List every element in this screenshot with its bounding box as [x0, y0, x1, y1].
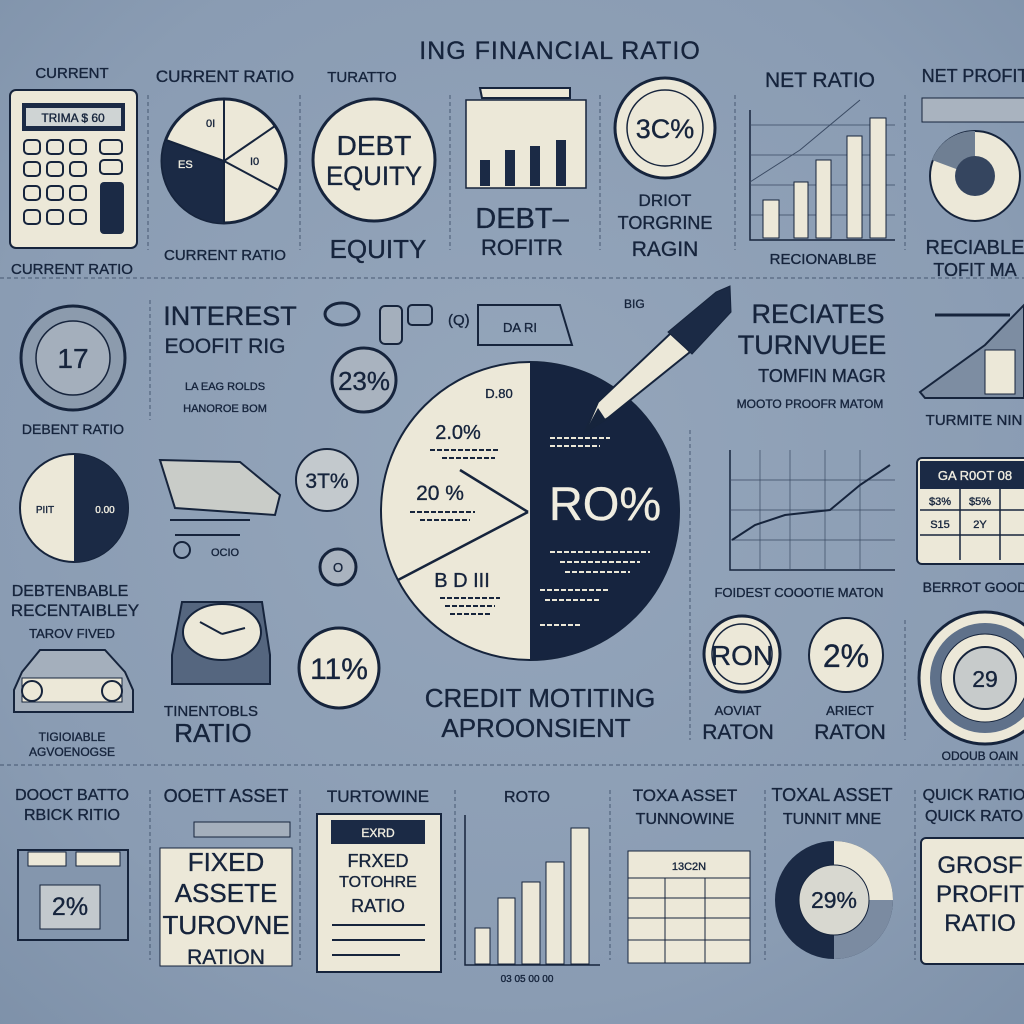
panel: target dial: ODOUB OAIN — [942, 749, 1018, 763]
panel: debt equity: DEBT — [337, 130, 411, 161]
panel: 2% badge — [809, 618, 886, 744]
panel: RON badge: RON — [711, 640, 773, 671]
panel: current ratio pie: CURRENT RATIO — [156, 67, 294, 86]
panel: total asset table: TOXA ASSET — [633, 786, 737, 805]
panel: total asset table: TUNNOWINE — [636, 811, 734, 828]
badge 11% — [299, 628, 379, 708]
panel: calculator: CURRENT RATIO — [11, 261, 133, 278]
icon: gauge: TINENTOBLS — [164, 703, 258, 720]
panel: current ratio pie: 0I — [206, 118, 215, 130]
badge 37%: 3T% — [305, 470, 349, 493]
panel: gross profit: QUICK RATO — [925, 808, 1023, 825]
bar chart: ratio — [465, 789, 600, 985]
panel: debt ratio coin: 17 — [57, 343, 89, 374]
panel: fixed asset: OOETT ASSET — [164, 786, 288, 806]
title: ING FINANCIAL RATIO — [419, 37, 701, 65]
line chart: FOIDEST COOOTIE MATON — [714, 585, 884, 600]
panel: percent badge: TORGRINE — [618, 213, 712, 233]
panel: receivable text: TAROV FIVED — [29, 626, 115, 641]
panel: quick ratio — [15, 787, 129, 940]
panel: net ratio bar chart: NET RATIO — [765, 69, 875, 92]
panel: debt equity: EQUITY — [326, 161, 422, 191]
line chart — [714, 450, 895, 600]
panel: fixed asset: RATION — [187, 946, 265, 969]
panel: target dial: 29 — [972, 666, 998, 692]
panel: interest heading: LA EAG ROLDS — [185, 381, 265, 393]
bar chart: ratio: ROTO — [504, 789, 550, 806]
panel: debt ratio coin: DEBENT RATIO — [22, 421, 124, 437]
icon row above central pie: (Q) — [448, 312, 470, 329]
panel: calculator: CURRENT — [35, 65, 109, 82]
panel: half pie: PIIT — [36, 505, 54, 516]
panel: table — [917, 458, 1024, 595]
panel: receivable text: DEBTENBABLE — [12, 583, 128, 600]
heading: credit monitoring — [425, 683, 655, 743]
panel: gross profit — [921, 787, 1024, 964]
panel: current ratio pie — [156, 67, 294, 264]
panel: gross profit: PROFIT — [936, 881, 1024, 908]
panel: table: $3% — [929, 496, 951, 508]
panel: RON badge — [702, 616, 780, 744]
panel: gross profit: GROSF — [937, 852, 1023, 879]
panel: receivables turnover: RECIATES — [751, 299, 885, 329]
panel: half pie: 0.00 — [95, 505, 115, 516]
panel: turnover document: FRXED — [347, 851, 409, 871]
panel: receivables turnover — [737, 299, 886, 411]
panel: net ratio bar chart: RECIONABLBE — [770, 251, 876, 268]
panel: debt ratio coin — [21, 306, 125, 437]
panel: table: S15 — [930, 519, 950, 531]
panel: net profit: RECIABLE — [926, 237, 1024, 259]
panel: 2% badge: RATON — [814, 721, 886, 744]
panel: total asset ring — [771, 785, 893, 959]
panel: 2% badge: ARIECT — [826, 703, 874, 718]
heading: credit monitoring: APROONSIENT — [441, 713, 631, 743]
icon: vehicle — [160, 460, 280, 559]
panel: car: TIGIOIABLE — [39, 730, 105, 744]
panel: quick ratio: RBICK RITIO — [24, 807, 120, 824]
panel: debt profit — [466, 88, 586, 260]
panel: total asset ring: TUNNIT MNE — [783, 811, 881, 828]
central pie chart: RO% — [549, 477, 661, 530]
panel: turnover document: RATIO — [351, 896, 405, 916]
panel: car: AGVOENOGSE — [29, 745, 115, 759]
panel: interest heading: EOOFIT RIG — [165, 335, 285, 358]
panel: fixed asset — [160, 786, 292, 969]
panel: RON badge: AOVIAT — [715, 703, 761, 718]
panel: car — [14, 650, 133, 759]
badge small coin: O — [333, 560, 343, 575]
panel: receivables turnover: MOOTO PROOFR MATOM — [737, 397, 883, 411]
panel: percent badge: RAGIN — [632, 238, 698, 261]
icon: gauge — [164, 602, 270, 748]
panel: fixed asset: TUROVNE — [162, 910, 290, 940]
panel: quick ratio: DOOCT BATTO — [15, 787, 129, 804]
panel: turnover document: TOTOHRE — [339, 874, 417, 891]
heading: credit monitoring: CREDIT MOTITING — [425, 683, 655, 713]
badge small coin — [320, 549, 356, 585]
icon: pen — [585, 286, 731, 432]
icon: building — [920, 305, 1024, 429]
central pie chart: D.80 — [485, 386, 513, 401]
panel: receivables turnover: TOMFIN MAGR — [758, 366, 886, 386]
panel: interest heading: INTEREST — [163, 301, 297, 331]
panel: RON badge: RATON — [702, 721, 774, 744]
panel: fixed asset: FIXED — [188, 847, 264, 877]
icon row above central pie: BIG — [624, 297, 645, 311]
panel: current ratio pie: ES — [178, 159, 193, 171]
badge 37% — [296, 449, 358, 511]
panel: net ratio bar chart — [750, 69, 895, 268]
panel: net profit: TOFIT MA — [933, 260, 1017, 280]
icon row above central pie — [325, 297, 645, 345]
panel: debt equity: EQUITY — [330, 234, 426, 264]
panel: table: GA R0OT 08 — [938, 468, 1012, 483]
panel: gross profit: RATIO — [944, 910, 1016, 937]
panel: total asset ring: TOXAL ASSET — [771, 785, 893, 805]
icon: building: TURMITE NIN — [926, 412, 1022, 429]
panel: total asset table — [628, 786, 750, 963]
panel: current ratio pie: I0 — [250, 156, 259, 168]
central pie chart — [381, 362, 679, 660]
central pie chart: 2.0% — [435, 422, 481, 444]
panel: receivables turnover: TURNVUEE — [738, 330, 886, 360]
panel: debt profit: ROFITR — [481, 235, 563, 260]
panel: debt equity — [313, 69, 435, 264]
panel: 2% badge: 2% — [823, 638, 869, 674]
panel: interest heading — [163, 301, 297, 415]
icon: gauge: RATIO — [174, 718, 252, 748]
badge 11%: 11% — [310, 653, 368, 686]
icon: vehicle: OCIO — [211, 547, 239, 559]
panel: total asset table: 13C2N — [672, 861, 706, 873]
panel: gross profit: QUICK RATIO — [923, 787, 1024, 804]
panel: debt profit: DEBT– — [475, 203, 570, 235]
badge 27%: 23% — [338, 366, 390, 396]
panel: half pie — [20, 454, 128, 562]
panel: turnover document: EXRD — [361, 826, 395, 840]
icon row above central pie: DA RI — [503, 320, 537, 335]
badge 27% — [332, 348, 396, 412]
panel: debt equity: TURATTO — [327, 69, 397, 86]
panel: turnover document: TURTOWINE — [327, 787, 429, 806]
panel: net profit — [922, 66, 1024, 280]
panel: interest heading: HANOROE BOM — [183, 403, 267, 415]
central pie chart: B D III — [434, 570, 490, 592]
central pie chart: 20 % — [416, 482, 464, 505]
panel: calculator — [10, 65, 137, 278]
panel: percent badge — [615, 78, 715, 261]
bar chart: ratio: 03 05 00 00 — [501, 974, 554, 985]
panel: receivable text: RECENTAIBLEY — [11, 601, 139, 620]
panel: table: $5% — [969, 496, 991, 508]
panel: target dial — [919, 612, 1024, 763]
panel: calculator: TRIMA $ 60 — [41, 111, 105, 125]
panel: total asset ring: 29% — [811, 887, 857, 913]
panel: fixed asset: ASSETE — [175, 878, 277, 908]
panel: turnover document — [317, 787, 441, 972]
panel: table: 2Y — [973, 519, 987, 531]
panel: quick ratio: 2% — [52, 893, 88, 921]
panel: current ratio pie: CURRENT RATIO — [164, 247, 286, 264]
panel: percent badge: 3C% — [636, 114, 694, 144]
panel: percent badge: DRIOT — [639, 191, 691, 210]
panel: receivable text — [11, 583, 139, 641]
